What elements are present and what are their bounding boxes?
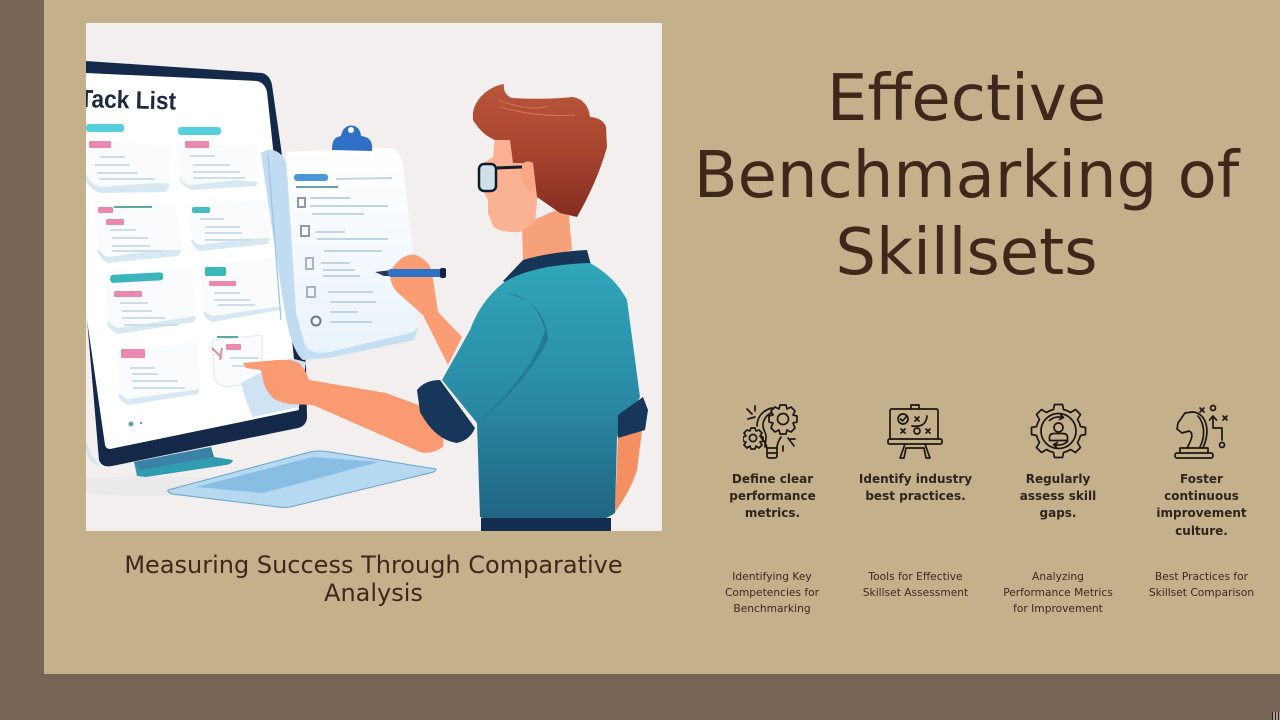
title [694, 62, 1240, 290]
step 1 description: Competencies for [725, 586, 819, 599]
monitor [86, 61, 307, 477]
step 3 label: gaps. [1040, 506, 1076, 520]
step 4 label: improvement [1156, 506, 1247, 520]
bottom band [0, 674, 1280, 720]
illustration caption: Measuring Success Through Comparative [124, 551, 623, 579]
step 4 label [1156, 472, 1247, 538]
illustration caption [124, 551, 623, 607]
step 3 description: for Improvement [1013, 602, 1103, 615]
left sidebar band [0, 0, 44, 720]
step 1 description: Identifying Key [732, 570, 812, 582]
step 3 description [1003, 570, 1113, 615]
step 2 description [863, 570, 968, 599]
icon: light bulb with gears [743, 404, 798, 459]
title: Skillsets [835, 216, 1098, 290]
illustration: person reviewing task list on monitor [86, 23, 662, 531]
step 2 label [859, 472, 972, 503]
task cards on screen [86, 124, 282, 426]
clipboard [241, 126, 418, 417]
step 1 label: Define clear [732, 472, 813, 486]
step 3 label [1020, 472, 1096, 520]
step 1 description [725, 570, 819, 615]
step 1 label [729, 472, 816, 520]
illustration caption: Analysis [324, 579, 423, 607]
icon: chess knight with strategy arrow [1174, 404, 1228, 459]
icon: gear with person [1030, 404, 1086, 458]
step 3 label: Regularly [1026, 472, 1090, 486]
step 2 description: Skillset Assessment [863, 586, 968, 599]
step 4 label: Foster [1180, 472, 1223, 486]
title: Benchmarking of [694, 139, 1239, 213]
step 2 label: best practices. [865, 489, 966, 503]
step 4 label: continuous [1164, 489, 1239, 503]
person [243, 84, 648, 532]
step 3 label: assess skill [1020, 489, 1096, 503]
step 1 label: metrics. [745, 506, 800, 520]
title: Effective [827, 62, 1106, 136]
corner mark [1272, 712, 1280, 720]
step 1 description: Benchmarking [733, 602, 811, 615]
step 4 label: culture. [1175, 524, 1228, 538]
step 4 description: Best Practices for [1155, 570, 1248, 582]
step 3 description: Performance Metrics [1003, 586, 1113, 599]
step 2 label: Identify industry [859, 472, 972, 486]
icon: strategy board on easel [887, 404, 943, 459]
step 1 label: performance [729, 489, 816, 503]
step 4 description [1149, 570, 1254, 599]
step 3 description: Analyzing [1032, 570, 1084, 582]
keyboard [168, 451, 436, 508]
monitor heading text: Tack List [79, 85, 177, 116]
step 2 description: Tools for Effective [868, 570, 963, 582]
step 4 description: Skillset Comparison [1149, 586, 1254, 599]
